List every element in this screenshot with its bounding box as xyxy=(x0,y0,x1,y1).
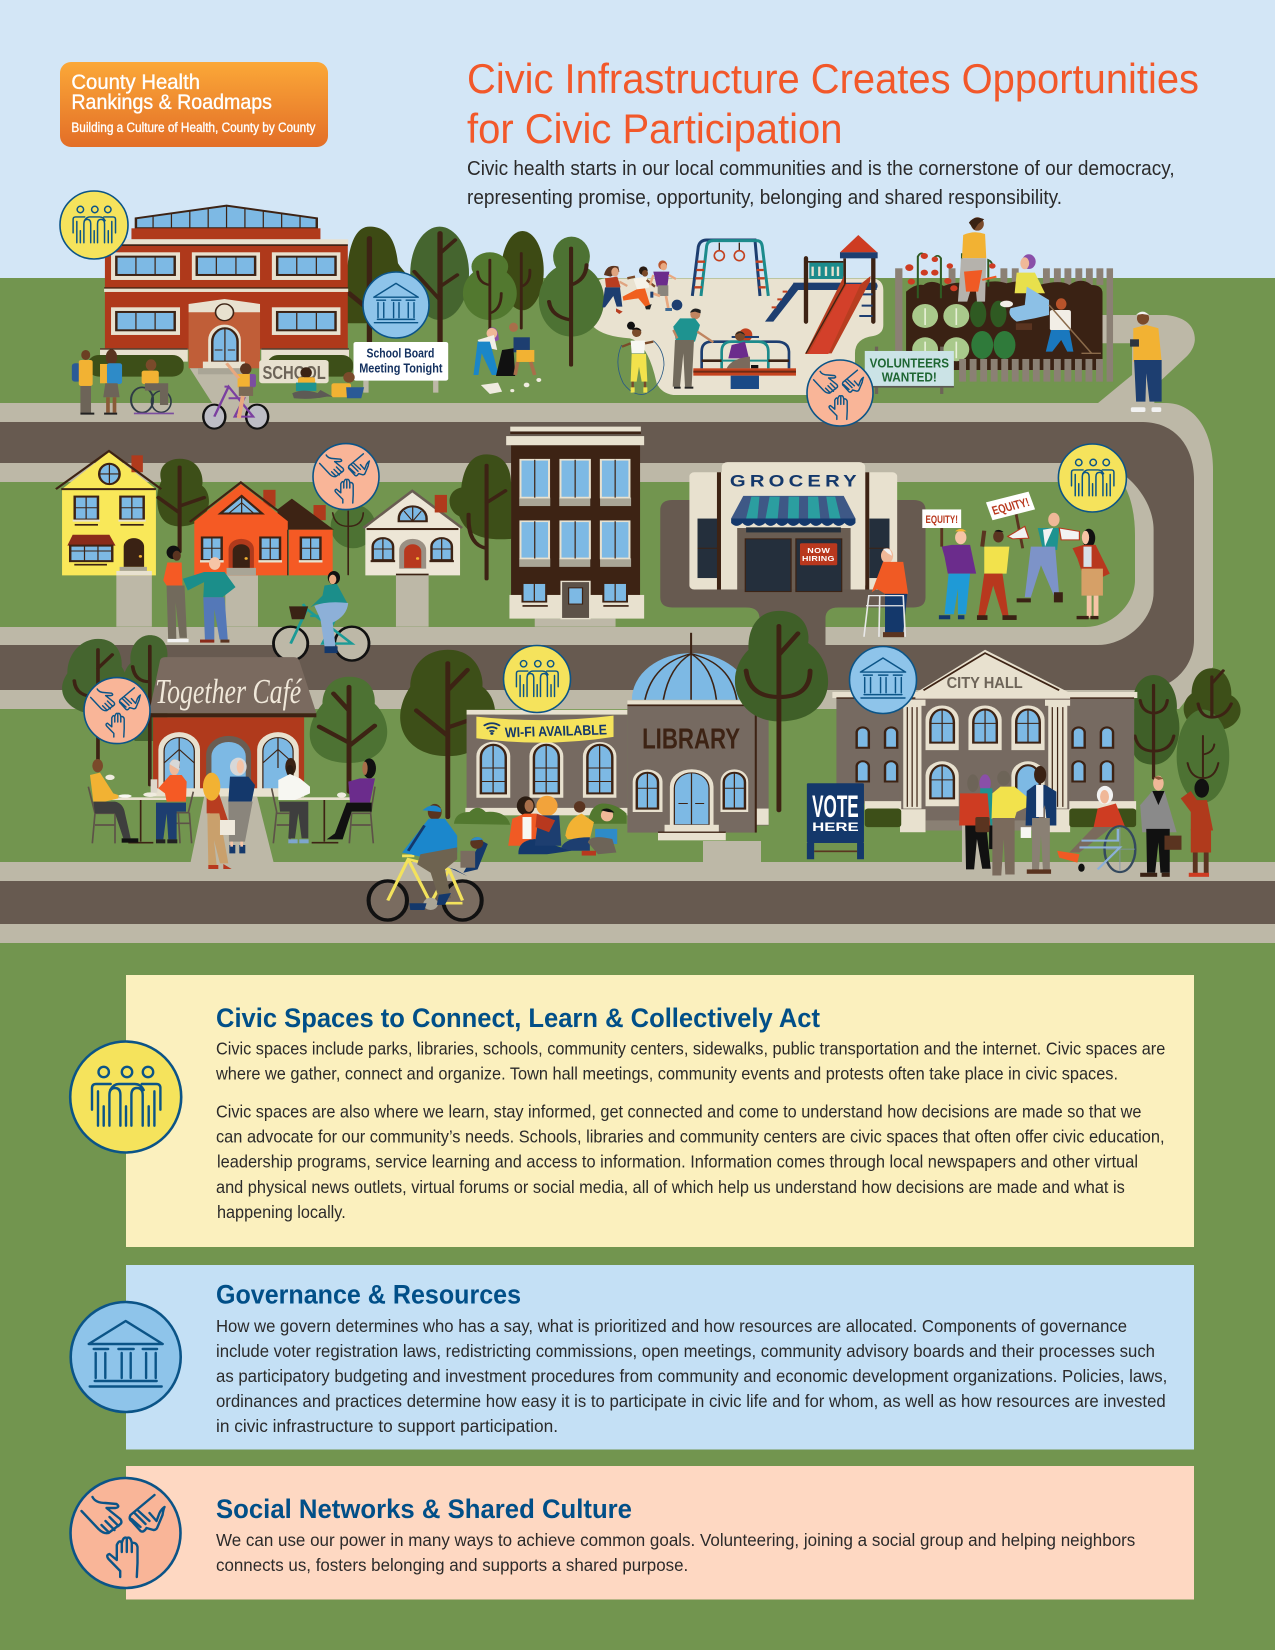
body text: civic spaces: where we gather, connect and organize. Town hall meetings, community events and protests often take place in civic spaces. xyxy=(215,1064,1118,1084)
playground ground xyxy=(593,278,883,395)
trees behind the cafe xyxy=(62,635,495,817)
people: cyclist with basket xyxy=(273,571,369,661)
logo: County Health Rankings & Roadmaps: Rankings & Roadmaps xyxy=(71,91,272,114)
building: Together Cafe xyxy=(149,657,316,862)
people: adult at the merry-go-round xyxy=(673,308,713,389)
icon: social networks xyxy=(70,1478,180,1588)
library walkway xyxy=(703,841,761,862)
people: students on the school lawn xyxy=(72,349,174,415)
sign: vote here: VOTE xyxy=(812,790,859,824)
people: protesters with equity signs and megaphones xyxy=(922,492,1110,620)
panel: civic spaces xyxy=(126,975,1194,1247)
body text: social networks xyxy=(216,1530,1136,1575)
building: library: LIBRARY xyxy=(642,723,740,755)
map icon: social networks, garden xyxy=(807,360,873,426)
sign: volunteers wanted: WANTED! xyxy=(882,371,937,385)
sign: volunteers wanted xyxy=(865,347,954,394)
trees behind the houses xyxy=(157,454,511,579)
logo: County Health Rankings & Roadmaps: County Health xyxy=(71,71,200,94)
people: friends reading outside the library xyxy=(508,796,617,856)
playground: merry-go-round with child xyxy=(693,328,796,389)
building: yellow house xyxy=(56,451,161,575)
sign: school board meeting tonight: Meeting Tonight xyxy=(359,362,443,376)
people: children reading xyxy=(292,367,364,399)
building: city hall: CITY HALL xyxy=(947,673,1023,692)
people: residents outside city hall xyxy=(959,766,1213,877)
building: library xyxy=(454,633,769,840)
body text: governance: as participatory budgeting and investment procedures from community and economic development organizations. Policies, laws, xyxy=(216,1366,1167,1386)
garden: raised beds, fence and plants xyxy=(895,253,1113,382)
sign: vote here xyxy=(807,783,864,859)
people: cyclist with child seat xyxy=(369,804,488,920)
people: kids running on the playground xyxy=(602,260,682,314)
street map with roads and sidewalks xyxy=(0,403,1275,943)
map icon: governance, city hall xyxy=(850,646,916,714)
trees behind the school xyxy=(346,227,604,365)
playground: monkey bars xyxy=(692,240,768,296)
title xyxy=(467,55,1199,152)
people: man with walker xyxy=(864,548,908,637)
people: two women on the cafe path xyxy=(203,758,255,869)
sign: school board meeting tonight: School Board xyxy=(367,347,434,361)
map icon: civic spaces, protest xyxy=(1058,444,1126,512)
sign: volunteers wanted: VOLUNTEERS xyxy=(870,357,949,371)
body text: social networks: We can use our power in many ways to achieve common goals. Volunteering, joining a social group and helping neighbors xyxy=(216,1530,1136,1550)
building: school xyxy=(88,206,353,403)
map icon: civic spaces, library xyxy=(504,646,570,712)
body text: governance: in civic infrastructure to support participation. xyxy=(216,1416,558,1436)
building: grocery store xyxy=(689,462,897,592)
heading: civic spaces: Civic Spaces to Connect, Learn & Collectively Act xyxy=(216,1003,820,1033)
map icon: governance, school board xyxy=(363,272,429,338)
map icon: social networks, houses xyxy=(313,444,379,510)
body text: civic spaces: happening locally. xyxy=(217,1202,346,1222)
building: apartment block xyxy=(506,427,644,619)
title: for Civic Participation xyxy=(467,105,842,152)
people: cyclist with purple bike xyxy=(203,363,268,429)
panel: governance and resources xyxy=(126,1265,1194,1450)
playground: slide structure xyxy=(765,235,878,354)
icon: civic spaces xyxy=(70,1042,181,1152)
body text: civic spaces xyxy=(215,1039,1165,1222)
body text: civic spaces: can advocate for our community’s needs. Schools, libraries and community centers are civic spaces that often offer civic education, xyxy=(216,1127,1164,1147)
body text: civic spaces: Civic spaces are also where we learn, stay informed, get connected and come to understand how decisions are made so that we xyxy=(216,1102,1141,1122)
icon: governance xyxy=(71,1302,181,1412)
garden path xyxy=(1096,315,1195,405)
map icon: social networks, cafe xyxy=(84,678,150,744)
intro text xyxy=(467,158,1175,209)
people: protesters with equity signs and megaphones: EQUITY! xyxy=(990,495,1031,517)
body text: civic spaces: Civic spaces include parks, libraries, schools, community centers, sidewalks, public transportation and the internet. Civic spaces are xyxy=(216,1039,1165,1059)
logo: County Health Rankings & Roadmaps xyxy=(60,62,328,147)
heading: social networks: Social Networks & Shared Culture xyxy=(216,1494,632,1524)
people: neighbours talking xyxy=(163,546,236,643)
map icon: civic spaces, school xyxy=(60,191,128,259)
body text: governance xyxy=(216,1316,1167,1436)
panel: social networks and shared culture xyxy=(126,1466,1194,1600)
body text: civic spaces: and physical news outlets, virtual forums or social media, all of which help us understand how decisions are made and what is xyxy=(216,1177,1125,1197)
building: orange house xyxy=(190,482,334,575)
banner: wi-fi available: WI-FI AVAILABLE xyxy=(505,723,607,741)
building: grocery store: NOW xyxy=(807,547,830,555)
body text: governance: ordinances and practices determine how easy it is to participate in civic life and for whom, as well as how resources are invested xyxy=(216,1391,1166,1411)
people: girl with jump rope xyxy=(618,322,664,394)
trees by city hall xyxy=(1134,668,1241,803)
tree by the grocery xyxy=(735,611,828,810)
title: Civic Infrastructure Creates Opportunities xyxy=(467,55,1199,102)
body text: governance: How we govern determines who has a say, what is prioritized and how resources are allocated. Components of governance xyxy=(216,1316,1127,1336)
sign: school: SCHOOL xyxy=(262,363,326,383)
intro text: Civic health starts in our local communities and is the cornerstone of our democracy, xyxy=(467,158,1175,180)
building: grocery store: HIRING xyxy=(802,555,834,563)
people: volunteers cleaning litter xyxy=(474,323,541,394)
building: city hall xyxy=(832,650,1137,863)
people: protesters with equity signs and megaphones: EQUITY! xyxy=(926,513,958,526)
people: photographer xyxy=(1130,312,1162,412)
banner: wi-fi available xyxy=(476,716,614,743)
sign: vote here: HERE xyxy=(812,820,859,834)
body text: civic spaces: leadership programs, service learning and access to information. Information comes through local newspapers and other virtual xyxy=(217,1152,1138,1172)
building: Together Cafe: Together Café xyxy=(155,672,302,711)
building: white house xyxy=(363,491,462,575)
logo: County Health Rankings & Roadmaps: Building a Culture of Health, County by County xyxy=(71,120,316,135)
building: grocery store: GROCERY xyxy=(730,471,857,490)
sign: school board meeting tonight xyxy=(354,342,448,393)
intro text: representing promise, opportunity, belonging and shared responsibility. xyxy=(467,187,1062,209)
sign: school xyxy=(259,360,329,383)
people: cafe tables with diners xyxy=(88,758,376,843)
people: gardeners xyxy=(958,217,1101,353)
heading: governance: Governance & Resources xyxy=(216,1280,521,1310)
body text: governance: include voter registration laws, redistricting commissions, open meetings, community advisory boards and their processes such xyxy=(216,1341,1155,1361)
body text: social networks: connects us, fosters belonging and supports a shared purpose. xyxy=(216,1555,688,1575)
